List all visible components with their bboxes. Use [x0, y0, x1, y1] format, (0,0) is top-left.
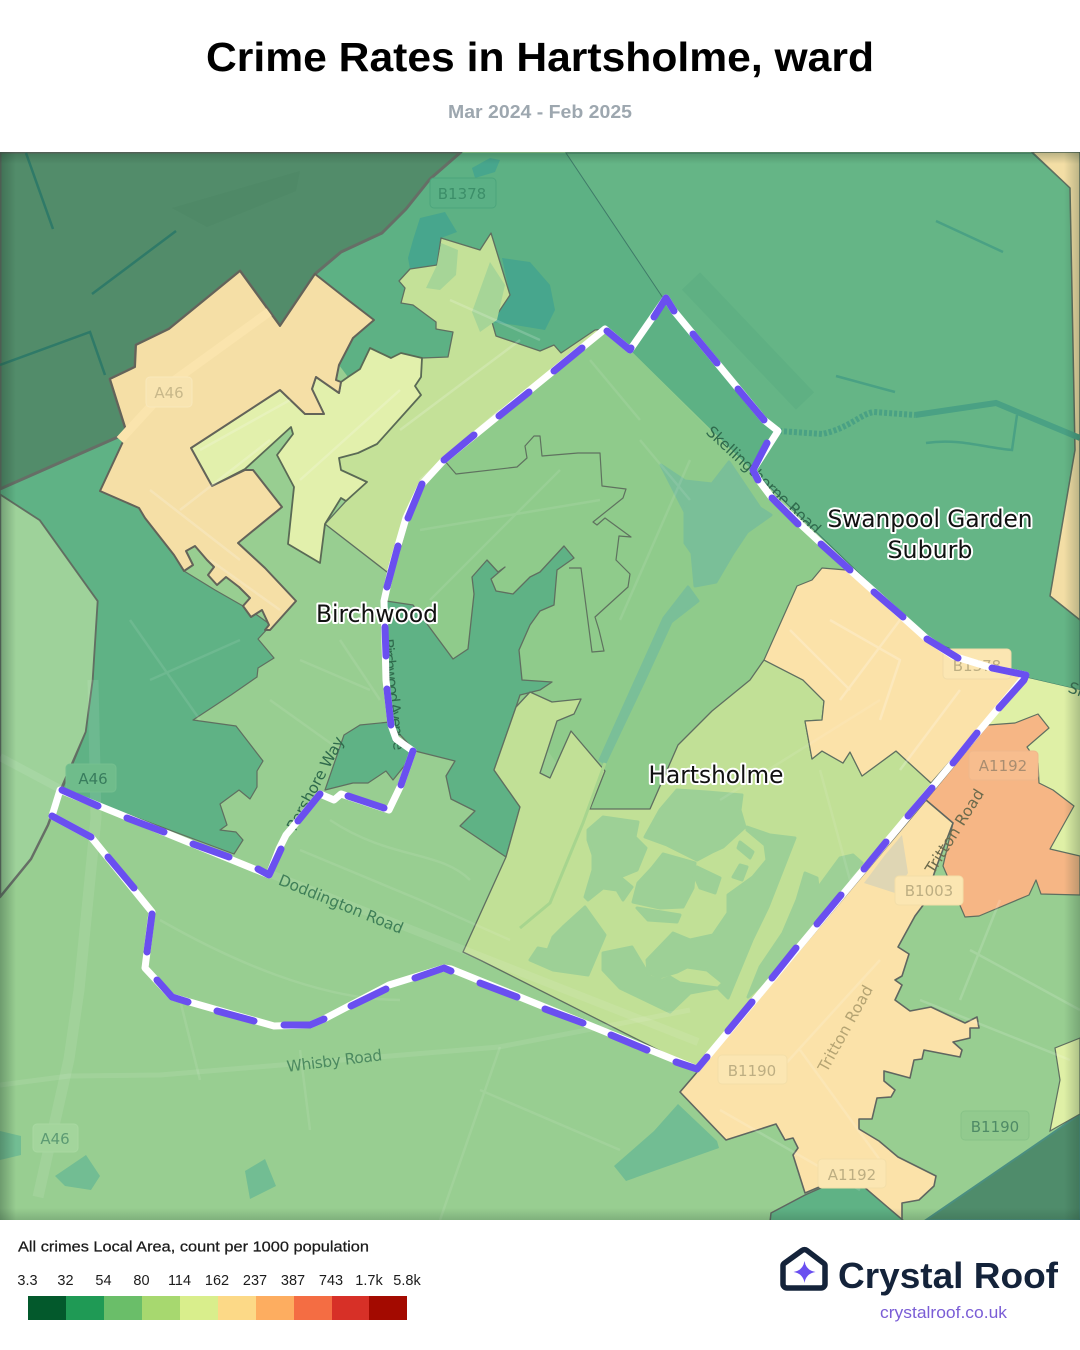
- road label: Whisby Road: Whisby Road: [286, 1046, 383, 1076]
- lake and river: [600, 462, 771, 763]
- logo: Crystal Roof: [783, 1250, 1059, 1322]
- grey patch near B1003: [864, 835, 908, 893]
- area: pale yellow green estate: [191, 348, 422, 563]
- road shield: B1190 west: B1190: [728, 1062, 776, 1080]
- icon: house with star: [783, 1250, 825, 1288]
- area: small mid green patch: [325, 722, 413, 790]
- map edge vignette: [0, 152, 1080, 1220]
- area: north east tan strip: [1032, 152, 1080, 620]
- place label: Swanpool Garden Suburb: Suburb: [888, 536, 972, 564]
- park patches in Hartsholme: [530, 790, 862, 1012]
- road shield: A1192 north: [969, 751, 1038, 780]
- road label: Pershore Way: Pershore Way: [283, 734, 348, 834]
- legend tick values: 114: [168, 1273, 191, 1289]
- road shield: A46 on green: [66, 764, 116, 792]
- road shield: B1190 east: [961, 1111, 1029, 1140]
- legend title: All crimes Local Area, count per 1000 population: [18, 1240, 369, 1256]
- road shield: B1190 west: [718, 1055, 787, 1084]
- map base: light green area: [0, 152, 1080, 1220]
- water and field details in north: [0, 153, 1080, 450]
- road shield: A1192 south: A1192: [828, 1166, 876, 1184]
- park patches in north yellow green: [426, 243, 505, 332]
- road shield: B1190 east: B1190: [971, 1118, 1019, 1136]
- road shield: B1378 east: B1378: [953, 657, 1001, 675]
- water patches in south: [0, 1104, 719, 1199]
- A46 road band on tan: [120, 312, 269, 440]
- place label: Birchwood: Birchwood: [316, 600, 438, 628]
- road label: Tritton Road south: Tritton Road: [814, 982, 877, 1076]
- area: Hartsholme yellow green: [463, 660, 940, 1070]
- legend tick values: 237: [243, 1273, 267, 1289]
- road shield: B1378 east: [943, 649, 1011, 679]
- area: south east pale estate: [1050, 1038, 1080, 1131]
- map panel: [0, 152, 1080, 1222]
- road label: Tritton Road north: Tritton Road: [921, 786, 988, 878]
- logo wordmark: Crystal Roof: [838, 1255, 1059, 1296]
- road shield: A1192 south: [818, 1159, 886, 1188]
- road shield: A46 south: A46: [40, 1130, 70, 1148]
- place label: Hartsholme: Hartsholme: [648, 761, 784, 789]
- subtitle: date range: Mar 2024 - Feb 2025: [448, 102, 632, 122]
- road shield: B1378 north: [430, 178, 496, 208]
- place label: Swanpool Garden Suburb: Swanpool Garden: [828, 505, 1032, 533]
- legend tick values: 5.8k: [393, 1273, 421, 1289]
- legend tick values: 162: [205, 1273, 229, 1289]
- road label: Doddington Road: Doddington Road: [276, 871, 406, 938]
- road label: Skellingthorpe Road: Skellingthorpe Road: [702, 423, 824, 538]
- road shield: B1003: B1003: [905, 882, 953, 900]
- legend tick values: 387: [281, 1273, 305, 1289]
- area: south tan estate: [680, 800, 979, 1222]
- area: orange high crime: [926, 714, 1080, 917]
- place label: Swanpool Garden Suburb: [828, 505, 1032, 564]
- road shield: A46 on green: A46: [78, 770, 108, 788]
- area: south east corner dark green: [926, 1114, 1080, 1220]
- road shield: A46 on tan: [146, 377, 192, 407]
- area: northern mid green: [317, 153, 774, 467]
- internal boundary line in ward: [444, 436, 631, 652]
- area: pale green east of ward: [988, 677, 1080, 856]
- area: western mid green: [0, 433, 274, 854]
- area: central ward light green: [384, 329, 850, 809]
- legend tick values: [17, 1273, 421, 1289]
- road shield: A46 on tan: A46: [154, 384, 184, 402]
- website link: crystalroof.co.uk: [880, 1304, 1008, 1322]
- area: Hartsholme north tan: [764, 568, 1026, 783]
- legend tick values: 80: [133, 1273, 150, 1289]
- legend tick values: 32: [57, 1273, 74, 1289]
- ward boundary: [52, 298, 1026, 1069]
- road network: [0, 300, 1080, 1220]
- area: north west tan estate: [100, 271, 374, 630]
- road shield: A1192 north: A1192: [979, 757, 1027, 775]
- road label: Birchwood Avenue: Birchwood Avenue: [378, 638, 408, 751]
- legend tick values: 3.3: [17, 1273, 38, 1289]
- legend: [17, 1240, 421, 1320]
- legend colour scale: [28, 1296, 407, 1320]
- area: north east mid green: [566, 153, 1080, 690]
- area: central mid green blob: [386, 546, 574, 857]
- area: bottom mid green patch: [770, 1188, 904, 1220]
- area: north yellow green: [325, 233, 605, 572]
- area: north west dark green: [0, 152, 461, 489]
- legend tick values: 1.7k: [355, 1273, 383, 1289]
- road shield: B1003: [895, 876, 963, 905]
- road shield: B1378 north: B1378: [438, 185, 486, 203]
- road shield: A46 south: [33, 1124, 78, 1152]
- park path line: [520, 763, 605, 928]
- area: western pale green strip: [0, 494, 98, 897]
- title: Crime Rates in Hartsholme, ward: [206, 34, 874, 80]
- legend tick values: 54: [95, 1273, 112, 1289]
- legend tick values: 743: [319, 1273, 343, 1289]
